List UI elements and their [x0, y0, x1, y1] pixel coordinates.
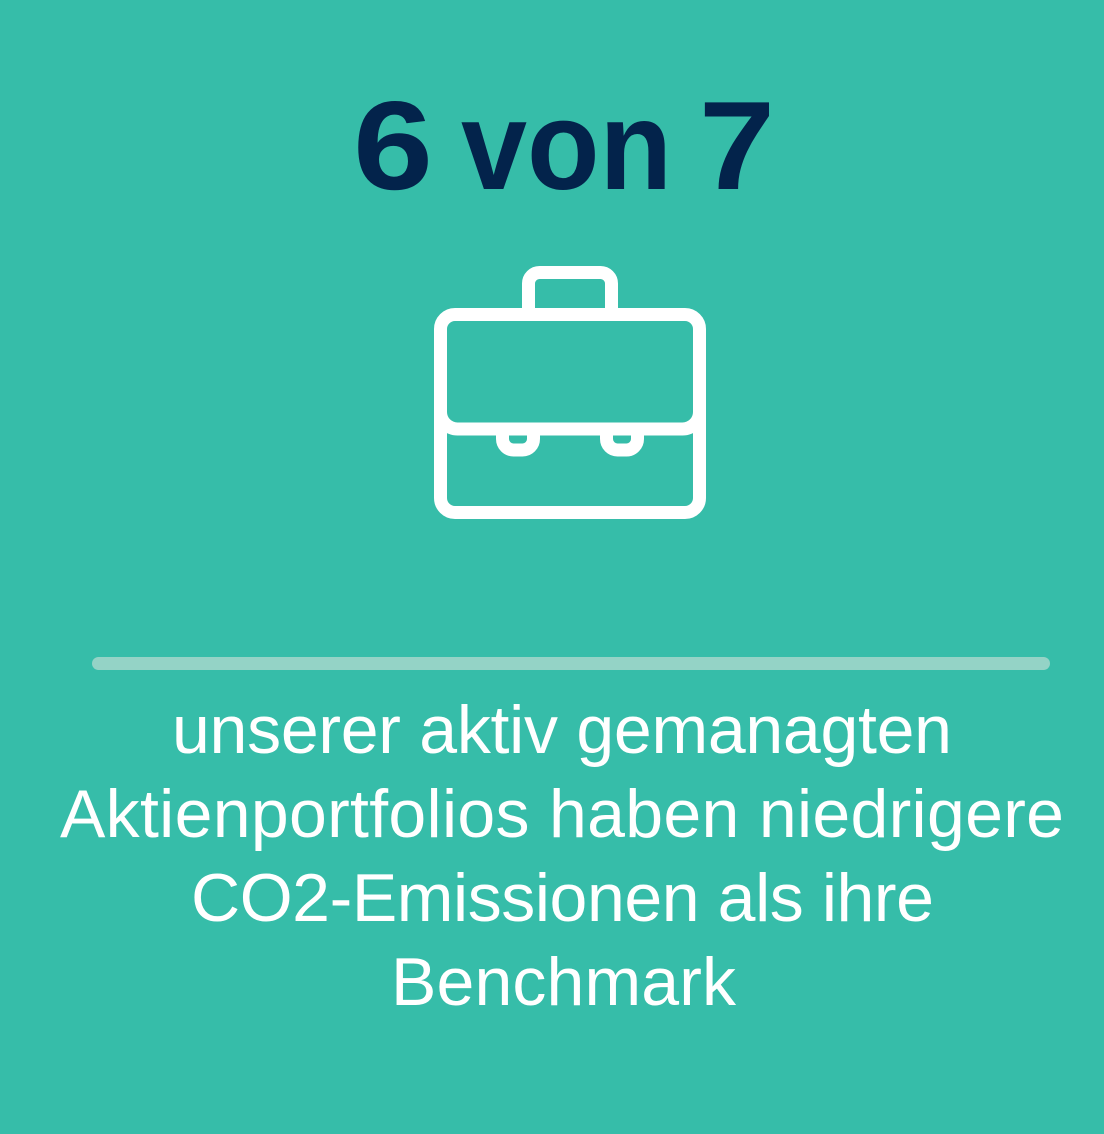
body text: unserer aktiv gemanagten [172, 692, 952, 768]
title: 6 von 7: 6 [353, 75, 433, 216]
body text: CO2-Emissionen als ihre [191, 860, 934, 936]
icon: briefcase [440, 272, 700, 512]
body text: Benchmark [391, 944, 737, 1020]
title: 6 von 7: 7 [699, 75, 775, 216]
divider bar [92, 657, 1050, 670]
body text: Aktienportfolios haben niedrigere [60, 776, 1064, 852]
body text [60, 692, 1064, 1020]
title: 6 von 7: von [461, 75, 672, 216]
